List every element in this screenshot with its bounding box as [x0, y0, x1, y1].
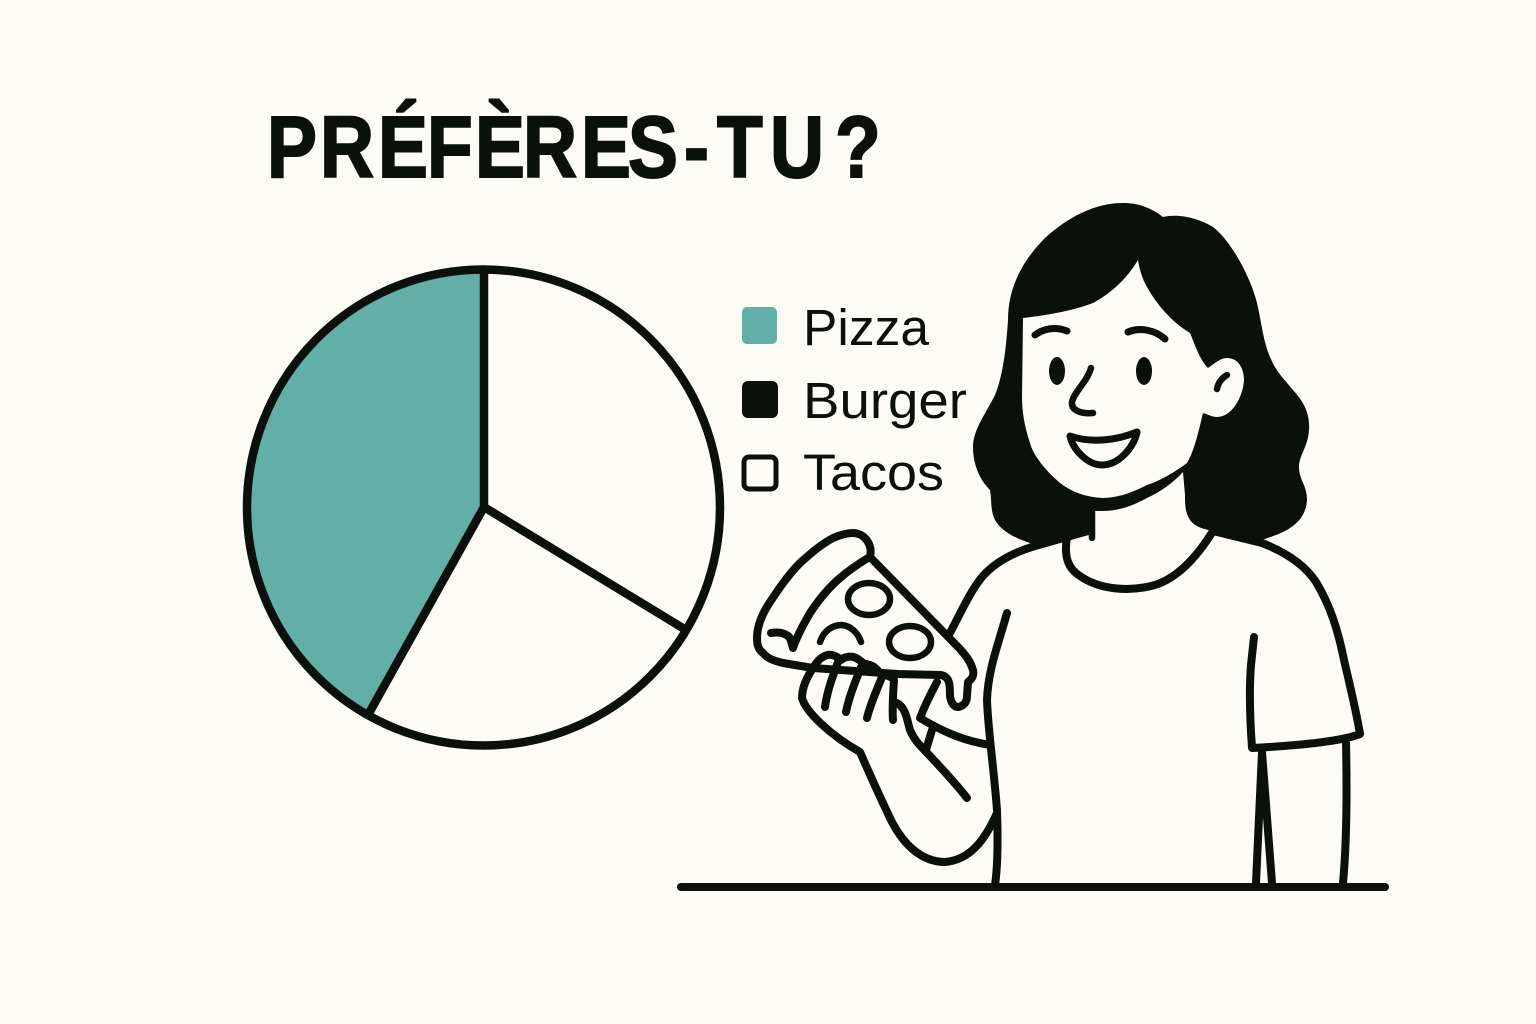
left sleeve — [920, 682, 990, 745]
nose — [1072, 368, 1093, 413]
legend label: Tacos: Tacos — [803, 444, 944, 501]
pie slice: Pizza — [248, 270, 484, 715]
pizza inner crust — [771, 558, 868, 648]
ear detail — [1217, 375, 1227, 389]
pizza crust — [757, 533, 973, 707]
legend label: Pizza: Pizza — [803, 299, 930, 356]
pepperoni half — [820, 625, 861, 642]
legend swatch: Tacos — [744, 457, 776, 489]
person illustration — [681, 203, 1385, 887]
face — [1022, 260, 1244, 498]
hair — [973, 203, 1309, 544]
pie outline — [247, 270, 720, 746]
right arm — [1256, 743, 1347, 883]
pepperoni — [889, 626, 931, 658]
hand and forearm — [802, 665, 997, 862]
legend label: Burger: Burger — [803, 372, 967, 429]
pepperoni — [848, 583, 890, 615]
legend swatch: Burger — [742, 381, 778, 418]
legend — [742, 299, 967, 501]
table — [681, 883, 1385, 891]
title: PRÉFÈRES-TU? — [267, 99, 881, 196]
eyes — [1049, 357, 1152, 385]
left arm inner line — [926, 730, 932, 750]
pie chart — [247, 270, 720, 746]
mouth — [1070, 432, 1137, 465]
shirt neckline — [1066, 531, 1213, 589]
eyebrows — [1035, 328, 1165, 339]
left shoulder — [950, 531, 1088, 633]
pie slice dividers — [368, 270, 686, 715]
right shoulder and sleeve — [1213, 531, 1360, 748]
legend swatch: Pizza — [742, 307, 777, 344]
thumb and wrist — [897, 703, 967, 798]
neck line — [1089, 512, 1095, 538]
torso left line — [987, 613, 1007, 885]
fingers — [815, 655, 894, 720]
pizza slice — [757, 533, 973, 707]
